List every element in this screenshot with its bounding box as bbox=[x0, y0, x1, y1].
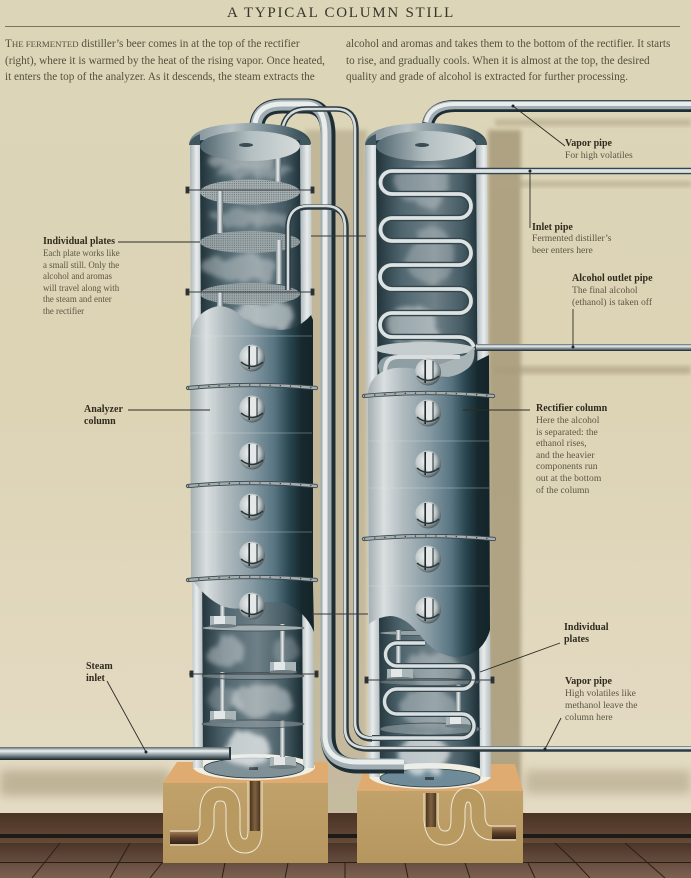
title: A TYPICAL COLUMN STILL bbox=[227, 5, 455, 21]
floor plate right bbox=[380, 769, 480, 787]
label: analyzer column bbox=[84, 404, 210, 427]
floor plate left bbox=[204, 758, 304, 778]
label: alcohol outlet pipe: Alcohol outlet pipe bbox=[572, 273, 653, 284]
condenser coil in rectifier bbox=[380, 171, 691, 347]
label: rectifier column: of the column bbox=[536, 485, 589, 496]
vapor pipes between columns bbox=[255, 104, 691, 766]
label: alcohol outlet pipe: (ethanol) is taken off bbox=[572, 297, 653, 308]
intro text left: (right), where it is warmed by the heat of the rising vapor. Once heated, bbox=[5, 55, 325, 67]
steam in analyzer bbox=[202, 152, 299, 763]
label: vapor pipe lower: column here bbox=[565, 712, 613, 723]
label: vapor pipe lower: Vapor pipe bbox=[565, 676, 613, 687]
lower rectifier plates bbox=[380, 630, 480, 735]
label: individual plates upper: a small still. Only the bbox=[43, 260, 119, 270]
label: rectifier column: ethanol rises, bbox=[536, 438, 587, 449]
steam in rectifier bbox=[386, 163, 459, 776]
label: individual plates upper bbox=[43, 236, 200, 316]
label: rectifier column: Rectifier column bbox=[536, 403, 608, 414]
label: rectifier column: components run bbox=[536, 461, 598, 472]
label: vapor pipe top: Vapor pipe bbox=[565, 138, 613, 149]
label: individual plates upper: will travel along with bbox=[43, 283, 120, 293]
analyzer left wall bbox=[190, 145, 203, 768]
label: individual plates lower: plates bbox=[564, 634, 589, 645]
label: rectifier column bbox=[463, 403, 608, 496]
rectifier outer jacket bbox=[368, 355, 490, 657]
label: vapor pipe lower bbox=[544, 676, 637, 750]
clamps and bolts bbox=[186, 187, 494, 683]
plinth: right base with buried pipe bbox=[357, 764, 523, 863]
rectifier flange bands bbox=[364, 393, 494, 539]
label: inlet pipe bbox=[528, 170, 612, 256]
label: alcohol outlet pipe bbox=[572, 273, 653, 348]
jacket panel seams bbox=[191, 336, 489, 586]
upper analyzer plates bbox=[200, 143, 300, 308]
lower rectifier coil bbox=[372, 643, 474, 738]
label: inlet pipe: Inlet pipe bbox=[532, 222, 573, 233]
intro text left: THE FERMENTED distiller’s beer comes in at the top of the rectifier bbox=[5, 38, 300, 50]
intro text right: alcohol and aromas and takes them to the bottom of the rectifier. It starts bbox=[346, 38, 670, 50]
intro text right: to rise, and gradually cools. When it is almost at the top, the desired bbox=[346, 55, 650, 67]
top vapor pipe right bbox=[426, 104, 691, 124]
analyzer right wall bbox=[300, 145, 314, 768]
label: vapor pipe top bbox=[512, 104, 633, 161]
label: rectifier column: Here the alcohol bbox=[536, 415, 600, 426]
alcohol outlet pipe bbox=[476, 344, 691, 351]
label: alcohol outlet pipe: The final alcohol bbox=[572, 285, 638, 296]
steam inlet pipe bbox=[0, 747, 231, 760]
label: rectifier column: and the heavier bbox=[536, 450, 595, 461]
label: analyzer column: Analyzer bbox=[84, 404, 123, 415]
analyzer base rim bbox=[193, 754, 315, 780]
column cap left bbox=[189, 123, 311, 161]
label: individual plates lower bbox=[480, 622, 609, 672]
label: individual plates upper: alcohol and aromas bbox=[43, 271, 113, 281]
label: analyzer column: column bbox=[84, 416, 116, 427]
label: vapor pipe top: For high volatiles bbox=[565, 150, 633, 161]
analyzer sight glasses bbox=[239, 344, 265, 620]
rectifier sight glasses bbox=[415, 358, 441, 624]
analyzer column interior bbox=[198, 140, 306, 772]
label: steam inlet: Steam bbox=[86, 661, 113, 672]
floor and skirting bbox=[0, 813, 691, 878]
rectifier right wall bbox=[476, 145, 491, 777]
label: individual plates upper: the rectifier bbox=[43, 306, 84, 316]
column cap right bbox=[365, 123, 487, 161]
label: individual plates upper: the steam and enter bbox=[43, 294, 112, 304]
intro text left: it enters the top of the analyzer. As it descends, the steam extracts the bbox=[5, 71, 315, 83]
plinth: left base with buried pipe bbox=[163, 762, 328, 863]
label: individual plates lower: Individual bbox=[564, 622, 609, 633]
rectifier base rim bbox=[369, 763, 491, 789]
label: inlet pipe: Fermented distiller’s bbox=[532, 233, 612, 244]
rectifier column interior bbox=[374, 140, 484, 782]
analyzer outer jacket bbox=[190, 306, 314, 632]
analyzer flange bands bbox=[188, 385, 316, 580]
label: rectifier column: is separated: the bbox=[536, 427, 598, 438]
label: rectifier column: out at the bottom bbox=[536, 473, 602, 484]
label: vapor pipe lower: High volatiles like bbox=[565, 688, 636, 699]
label: steam inlet: inlet bbox=[86, 673, 106, 684]
label: inlet pipe: beer enters here bbox=[532, 245, 593, 256]
collecting tray in rectifier bbox=[375, 342, 475, 377]
wall shadows bbox=[0, 119, 691, 815]
lower analyzer plates bbox=[202, 598, 304, 769]
rectifier left wall bbox=[365, 145, 380, 777]
label: steam inlet bbox=[86, 661, 148, 754]
label: individual plates upper: Individual plates bbox=[43, 236, 115, 247]
label: vapor pipe lower: methanol leave the bbox=[565, 700, 637, 711]
intro text right: quality and grade of alcohol is extracted for further processing. bbox=[346, 71, 628, 83]
title rule bbox=[5, 26, 680, 27]
label: individual plates upper: Each plate works like bbox=[43, 248, 120, 258]
